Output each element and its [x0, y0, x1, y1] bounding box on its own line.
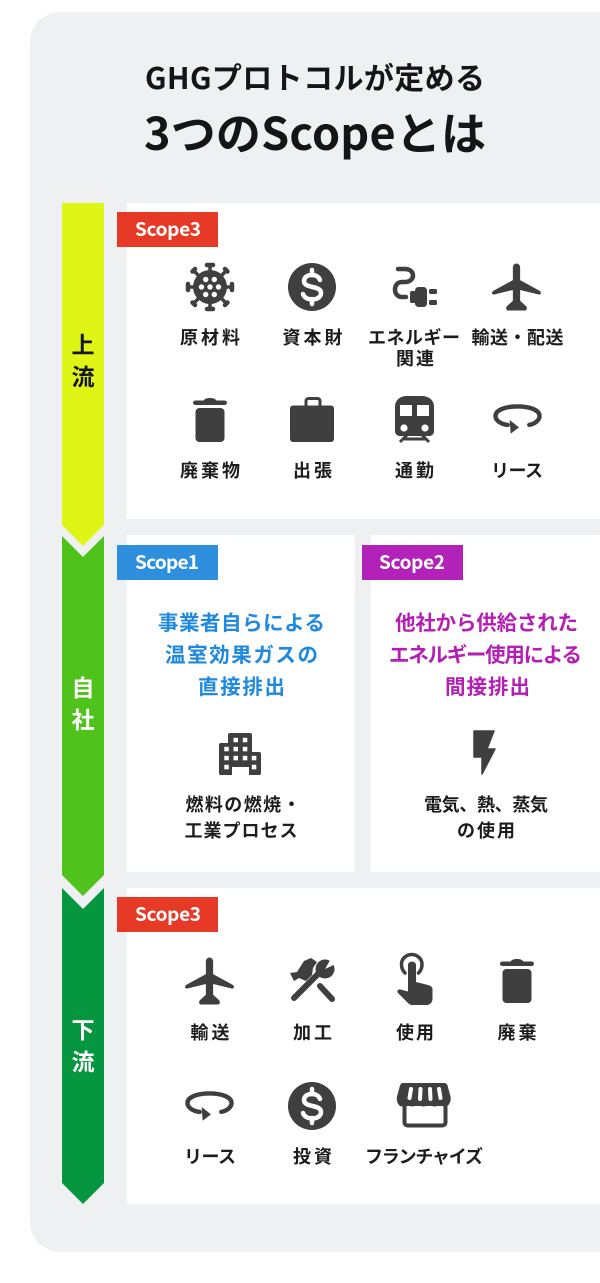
- icon: building: [219, 733, 261, 775]
- label: transport: 輸送: [190, 1019, 230, 1045]
- text: indirect emissions description: 間接排出: [445, 670, 530, 700]
- label: electricity, heat and steam use: の使用: [457, 817, 515, 843]
- label: commuting: 通勤: [395, 457, 434, 483]
- arrow: upstream: 上: [72, 326, 94, 360]
- icon: lightning bolt: [474, 731, 495, 774]
- title: [144, 54, 486, 163]
- label: fuel combustion and industrial processes: 燃料の燃焼・: [186, 791, 300, 817]
- icon: train: [395, 396, 434, 442]
- text: indirect emissions description: [389, 606, 582, 700]
- icon: transport plane: [492, 263, 541, 311]
- title: 3つのScopeとは: [144, 98, 486, 163]
- icon: lease: [495, 406, 540, 434]
- badge: Scope3: [117, 897, 218, 932]
- text: indirect emissions description: エネルギー使用による: [389, 638, 582, 668]
- badge: Scope1: Scope1: [135, 548, 199, 575]
- label: lease: リース: [184, 1143, 236, 1169]
- label: transport and delivery: 輸送・配送: [472, 324, 564, 350]
- label: waste: 廃棄物: [180, 457, 240, 483]
- arrow: own company: [62, 536, 104, 896]
- badge: Scope3: Scope3: [135, 215, 201, 242]
- panel: upstream Scope3: [117, 203, 600, 519]
- icon: energy plug: [395, 269, 437, 307]
- label: energy related: [368, 324, 460, 371]
- label: capital goods: 資本財: [282, 324, 342, 350]
- badge: Scope1: [117, 545, 218, 580]
- arrow: upstream: [62, 203, 104, 546]
- text: direct emissions description: 温室効果ガスの: [165, 638, 318, 668]
- panel: downstream Scope3: [117, 888, 600, 1204]
- icon: tools: [290, 957, 338, 999]
- label: disposal: 廃棄: [498, 1019, 536, 1045]
- label: lease: リース: [491, 457, 543, 483]
- label: processing: 加工: [293, 1019, 332, 1045]
- label: electricity, heat and steam use: 電気、熱、蒸気: [424, 791, 548, 817]
- text: indirect emissions description: 他社から供給された: [395, 606, 578, 636]
- badge: Scope2: [362, 545, 463, 580]
- label: franchise: フランチャイズ: [365, 1143, 483, 1169]
- arrow: upstream: 流: [72, 358, 94, 392]
- badge: Scope3: Scope3: [135, 900, 201, 927]
- label: use: 使用: [396, 1019, 434, 1045]
- icon: capital goods: [288, 263, 336, 311]
- label: fuel combustion and industrial processes: [184, 791, 300, 843]
- icon: investment dollar: [288, 1082, 336, 1130]
- icon: raw materials: [187, 264, 233, 310]
- label: energy related: エネルギー: [368, 324, 460, 350]
- label: business travel: 出張: [293, 457, 332, 483]
- label: electricity, heat and steam use: [424, 791, 548, 843]
- label: raw materials: 原材料: [180, 324, 240, 350]
- icon: waste bin: [500, 959, 534, 1003]
- label: energy related: 関連: [396, 345, 434, 371]
- label: fuel combustion and industrial processes: 工業プロセス: [184, 817, 298, 843]
- text: direct emissions description: [158, 606, 325, 700]
- icon: lease: [187, 1093, 232, 1121]
- label: investment: 投資: [293, 1143, 332, 1169]
- panel: Scope2: [362, 535, 600, 872]
- arrow: downstream: [62, 888, 104, 1204]
- icon: touch hand: [397, 954, 432, 1005]
- icon: briefcase: [290, 398, 334, 442]
- badge: Scope3: [117, 212, 218, 247]
- icon: transport plane: [185, 957, 234, 1005]
- badge: Scope2: Scope2: [379, 548, 445, 575]
- panel: Scope1: [117, 535, 355, 872]
- icon: storefront: [397, 1083, 451, 1126]
- text: direct emissions description: 直接排出: [198, 670, 285, 700]
- arrow: downstream: 流: [72, 1043, 94, 1077]
- arrow: downstream: 下: [72, 1011, 94, 1045]
- text: direct emissions description: 事業者自らによる: [158, 606, 325, 636]
- arrow: own company: 社: [72, 701, 94, 735]
- title: GHGプロトコルが定める: [145, 54, 485, 98]
- arrow: own company: 自: [72, 669, 94, 703]
- icon: waste bin: [193, 398, 227, 442]
